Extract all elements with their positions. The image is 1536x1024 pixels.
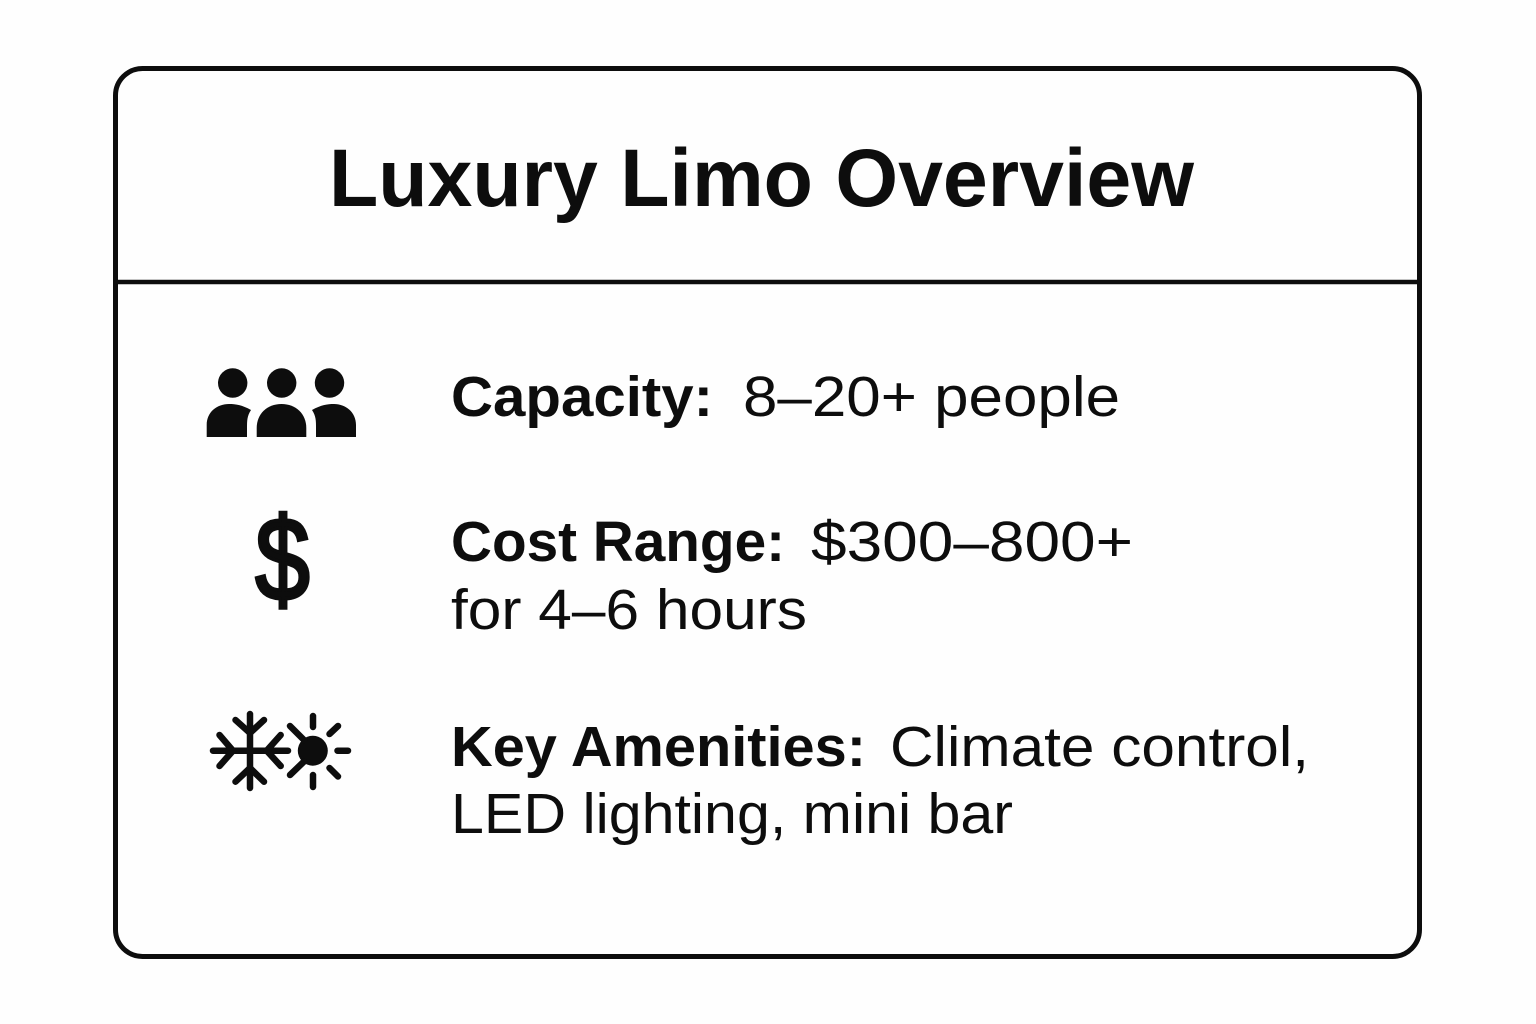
cost range row: $300–800+ (811, 510, 1133, 574)
capacity row: 8–20+ people (743, 365, 1120, 429)
capacity row: Capacity: (451, 365, 713, 429)
key amenities row: Climate control, (890, 715, 1309, 779)
cost range row: Cost Range: (451, 510, 785, 574)
key amenities row: Key Amenities: (451, 715, 866, 779)
cost range row: for 4–6 hours (451, 578, 807, 642)
icon: three people (207, 368, 356, 437)
key amenities row (451, 715, 1309, 846)
icon: dollar sign: $ (255, 494, 310, 625)
title: Luxury Limo Overview (329, 133, 1194, 224)
panel: overview card (116, 68, 1420, 956)
capacity row (451, 365, 1120, 429)
key amenities row: LED lighting, mini bar (451, 782, 1013, 846)
cost range row (451, 510, 1133, 642)
icon: snowflake and sun (213, 714, 348, 788)
